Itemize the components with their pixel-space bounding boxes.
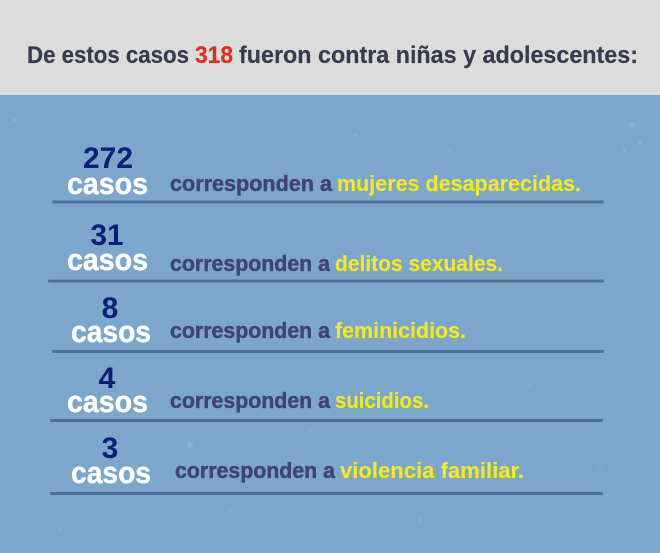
row: 3 casos [50, 432, 603, 495]
row: 272 casos: 272 [83, 142, 133, 175]
row: 31 casos [48, 219, 604, 282]
row: 3 casos: 3 [102, 432, 118, 465]
row: 31 casos: corresponden a [170, 251, 331, 276]
title [27, 42, 638, 69]
title: 318 [195, 42, 233, 69]
row: 4 casos [50, 362, 603, 422]
row: 8 casos: 8 [102, 292, 118, 325]
row: 4 casos: casos [67, 384, 148, 419]
title: fueron contra niñas y adolescentes: [239, 42, 638, 69]
row: 3 casos: casos [71, 455, 151, 490]
row: 3 casos: violencia familiar. [340, 458, 524, 483]
row: 31 casos: casos [67, 242, 148, 277]
row: 4 casos: corresponden a [170, 388, 331, 413]
row: 272 casos: casos [67, 166, 148, 201]
row: 8 casos [52, 292, 604, 353]
row: 272 casos: corresponden a [170, 171, 333, 196]
row: 272 casos [52, 142, 604, 204]
title: De estos casos [27, 42, 189, 69]
row: 8 casos: casos [71, 314, 151, 349]
row: 8 casos: corresponden a [170, 318, 331, 343]
row: 4 casos: suicidios. [335, 388, 429, 413]
row: 272 casos: mujeres desaparecidas. [337, 171, 581, 196]
row: 8 casos: feminicidios. [335, 318, 466, 343]
row: 31 casos: delitos sexuales. [335, 251, 503, 276]
header band [0, 0, 660, 95]
row: 31 casos: 31 [90, 219, 124, 252]
row: 4 casos: 4 [99, 362, 116, 395]
row: 3 casos: corresponden a [175, 458, 336, 483]
